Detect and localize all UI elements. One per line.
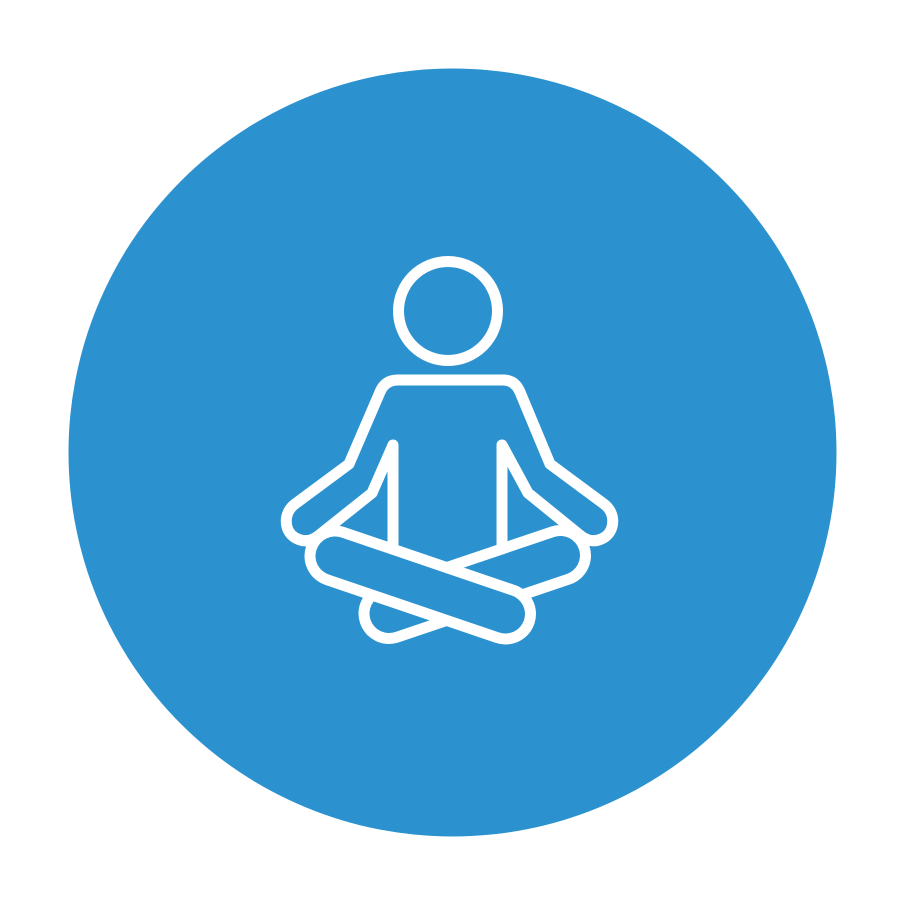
back leg [389, 556, 560, 614]
icon: meditating person [286, 262, 613, 614]
head [398, 262, 498, 360]
torso and arms [286, 380, 613, 545]
blue circle background [68, 68, 836, 836]
front leg [335, 556, 506, 614]
